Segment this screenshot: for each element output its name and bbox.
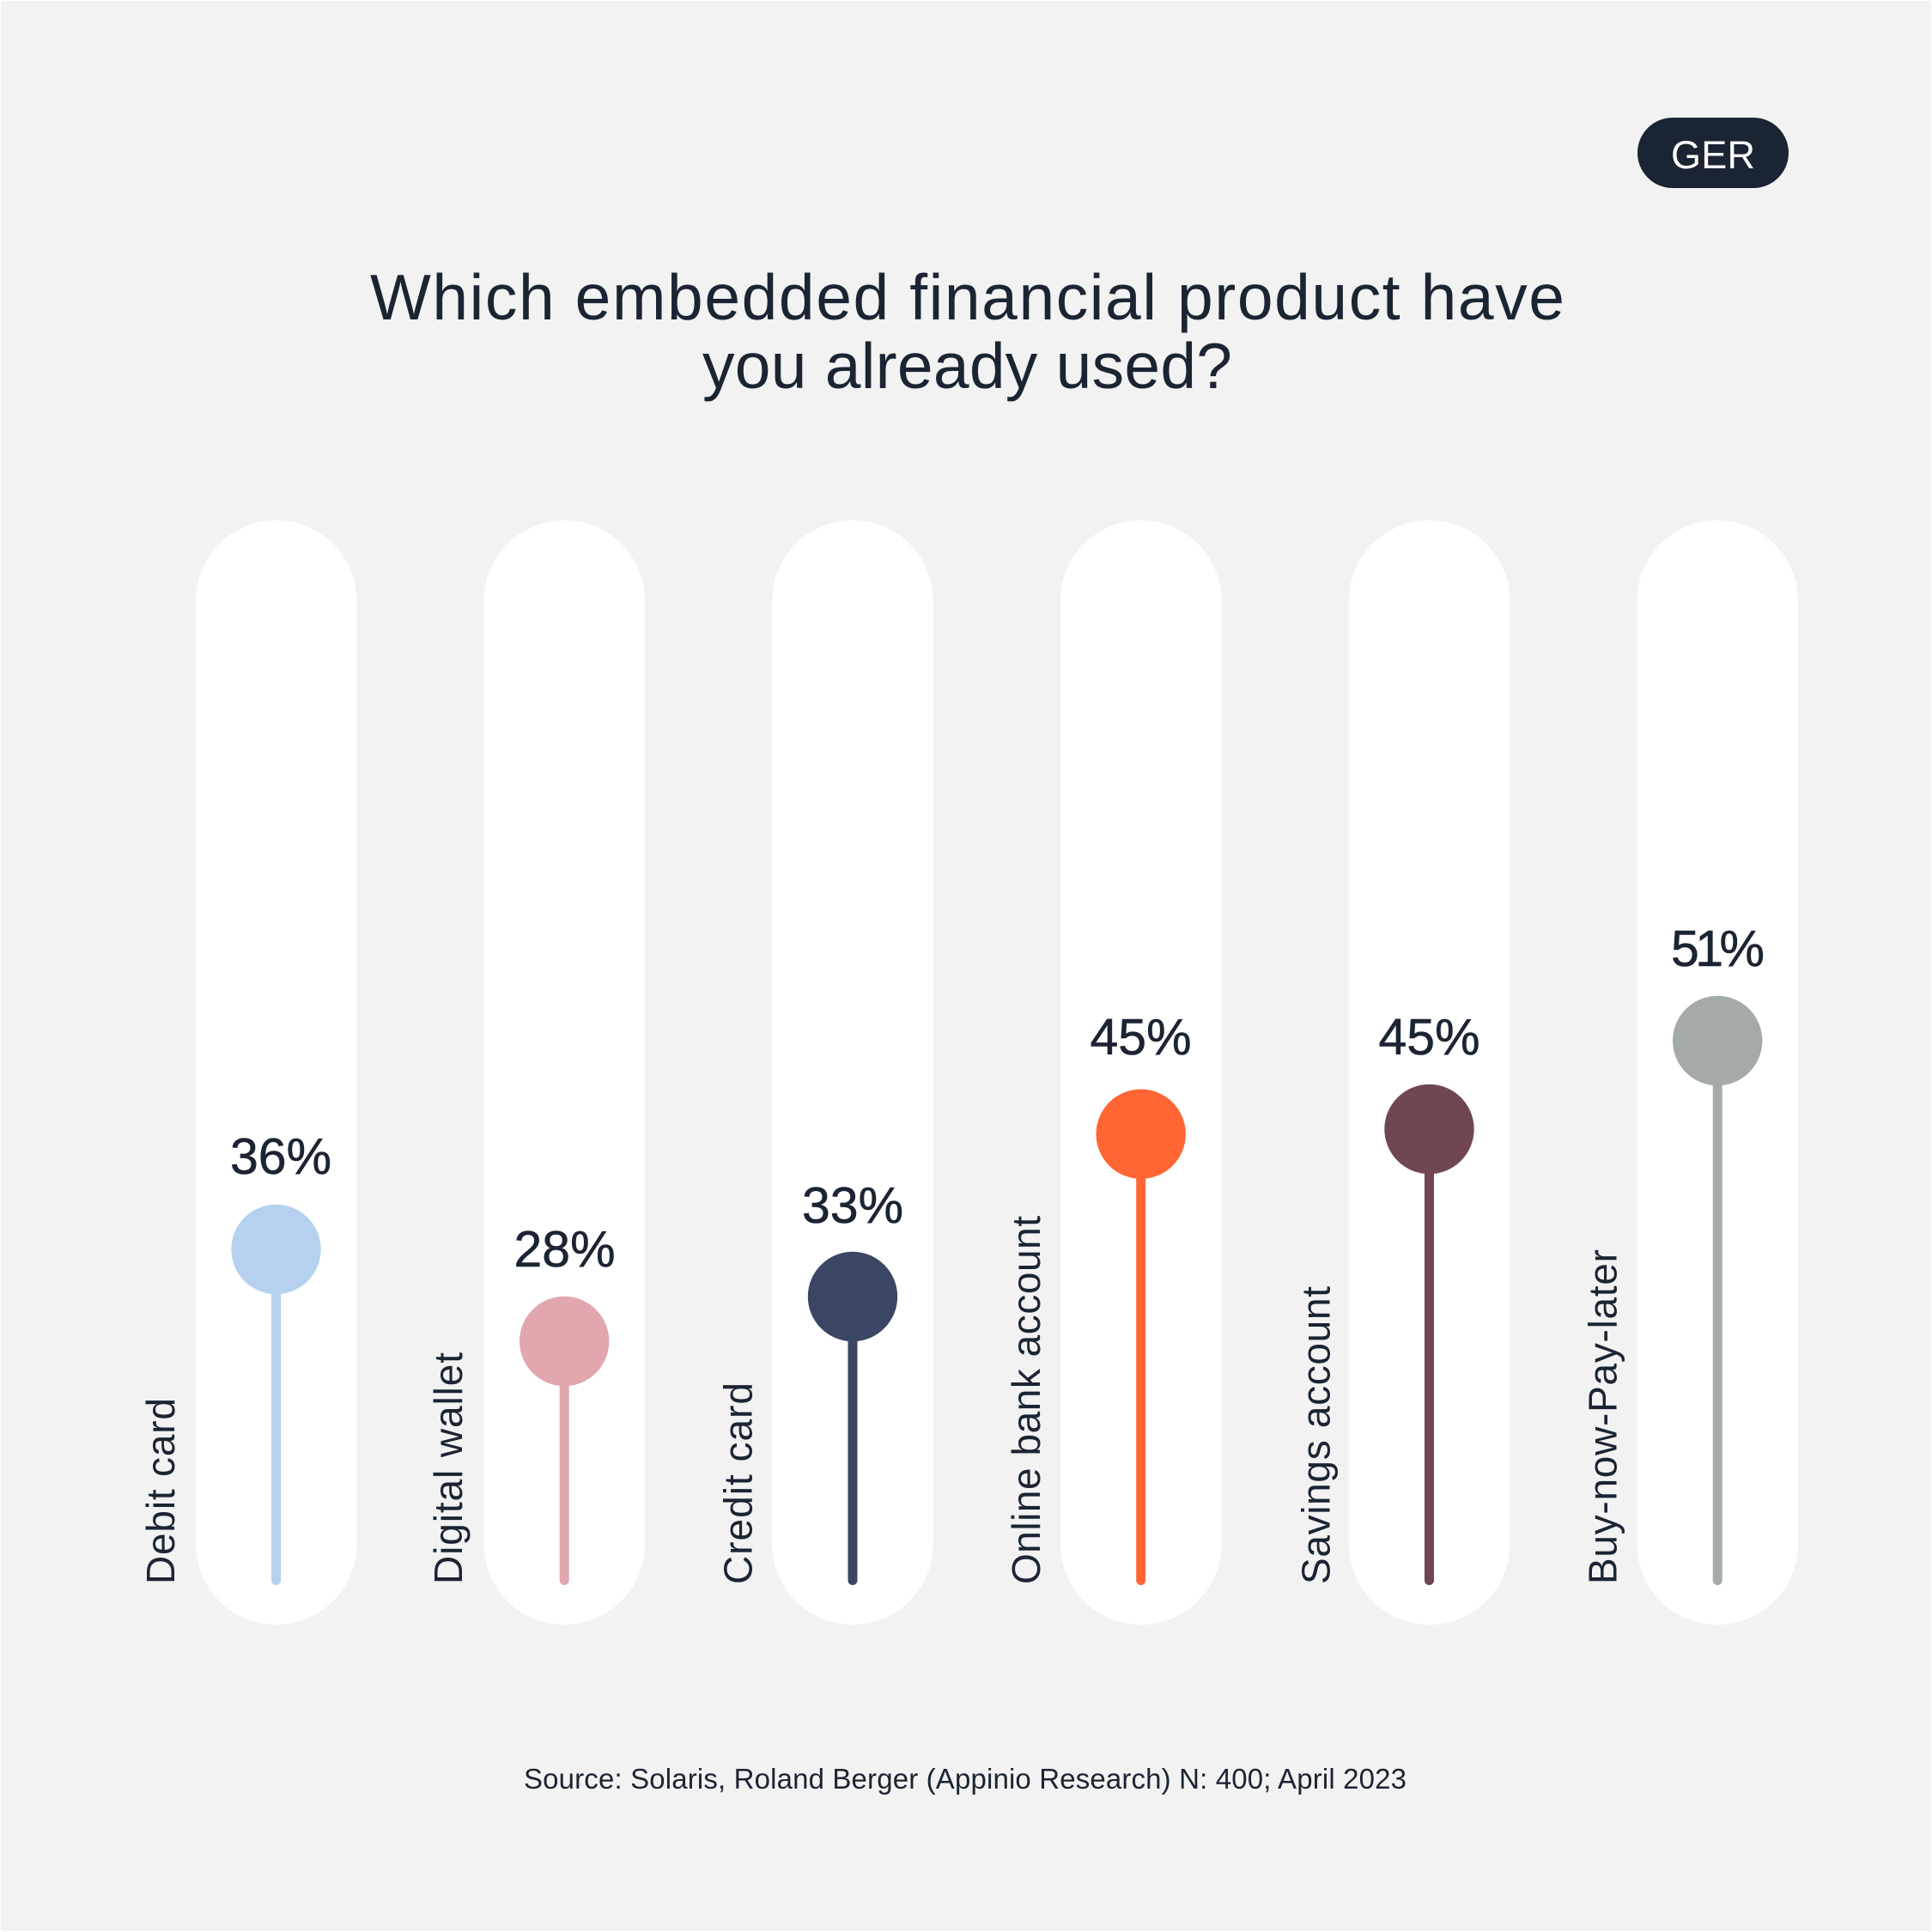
column: Buy-now-Pay-later 51% (1580, 520, 1798, 1625)
column: Credit card 33% (716, 520, 933, 1625)
value: 33%: 33% (802, 1177, 903, 1234)
lollipop: Credit card (808, 1252, 897, 1585)
value: 28%: 28% (513, 1221, 616, 1278)
badge: GER (1637, 118, 1789, 188)
track: Savings account (1349, 520, 1510, 1625)
label: Buy-now-Pay-later: Buy-now-Pay-later (1580, 1249, 1625, 1584)
track: Buy-now-Pay-later (1637, 520, 1798, 1625)
value: 45%: 45% (1378, 1009, 1480, 1066)
label: Credit card: Credit card (716, 1382, 761, 1584)
value: 45%: 45% (1090, 1009, 1192, 1066)
title: you already used? (702, 330, 1232, 402)
value: 51%: 51% (1671, 920, 1765, 977)
title (370, 261, 1564, 402)
column: Debit card 36% (138, 520, 357, 1625)
value: 36%: 36% (230, 1128, 331, 1185)
lollipop: Online bank account (1096, 1089, 1186, 1585)
track: Credit card (772, 520, 933, 1625)
track: Digital wallet (484, 520, 645, 1625)
label: Savings account: Savings account (1293, 1286, 1338, 1584)
track: Online bank account (1060, 520, 1221, 1625)
column: Savings account 45% (1293, 520, 1510, 1625)
column: Digital wallet 28% (426, 520, 645, 1625)
column: Online bank account 45% (1004, 520, 1221, 1625)
lollipop: Savings account (1384, 1084, 1474, 1585)
label: Online bank account: Online bank account (1004, 1216, 1048, 1584)
title: Which embedded financial product have (370, 261, 1564, 333)
lollipop: Buy-now-Pay-later (1673, 996, 1762, 1585)
badge: GER: GER (1671, 133, 1755, 177)
label: Digital wallet: Digital wallet (426, 1352, 471, 1584)
lollipop: Digital wallet (519, 1297, 609, 1585)
lollipop: Debit card (231, 1205, 321, 1585)
source note: Source: Solaris, Roland Berger (Appinio Research) N: 400; April 2023 (524, 1763, 1406, 1795)
label: Debit card: Debit card (138, 1398, 183, 1584)
track: Debit card (196, 520, 357, 1625)
